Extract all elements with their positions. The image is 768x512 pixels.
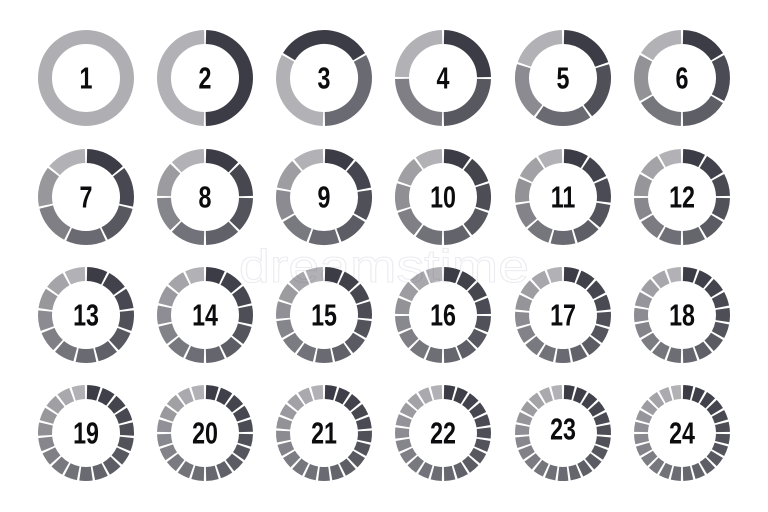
ring 4	[401, 36, 485, 120]
ring 10 segments	[384, 138, 502, 256]
ring 23 segments	[504, 374, 622, 492]
ring 20 segments	[146, 374, 264, 492]
ring 3 segments, dark one centred on top	[247, 1, 401, 155]
ring 5	[504, 19, 622, 137]
ring 9 segments	[265, 138, 383, 256]
number 9: 9	[318, 179, 330, 214]
ring 14	[146, 256, 264, 374]
number 3: 3	[318, 60, 330, 95]
number 7: 7	[80, 179, 92, 214]
ring 15	[265, 256, 383, 374]
ring 21	[265, 374, 383, 492]
ring 19	[27, 374, 145, 492]
ring 24	[623, 374, 741, 492]
number 8: 8	[199, 179, 211, 214]
ring 15 segments	[265, 256, 383, 374]
ring 11	[504, 138, 622, 256]
number 1: 1	[80, 60, 92, 95]
ring 1 segments	[45, 37, 127, 119]
ring 13 segments	[27, 256, 145, 374]
ring 6	[625, 21, 739, 135]
ring 5 segments	[504, 19, 622, 137]
number 15: 15	[311, 297, 337, 332]
ring 16 segments	[384, 256, 502, 374]
ring 4 segments	[401, 36, 485, 120]
ring 11 segments	[504, 138, 622, 256]
number 19: 19	[73, 415, 99, 450]
ring 22 segments	[384, 374, 502, 492]
ring 22	[384, 374, 502, 492]
ring 6 segments	[625, 21, 739, 135]
ring 2	[163, 36, 247, 120]
number 5: 5	[557, 60, 569, 95]
ring 7 segments	[27, 138, 145, 256]
number 24: 24	[669, 415, 696, 450]
number 12: 12	[669, 179, 695, 214]
number 6: 6	[676, 60, 688, 95]
number 2: 2	[199, 60, 211, 95]
number 4: 4	[437, 60, 450, 95]
ring 3	[247, 1, 401, 155]
ring 2 segments	[163, 36, 247, 120]
ring 20	[146, 374, 264, 492]
ring 10	[384, 138, 502, 256]
number 22: 22	[430, 415, 456, 450]
ring 7	[27, 138, 145, 256]
ring 13	[27, 256, 145, 374]
ring 18	[623, 256, 741, 374]
ring 23	[504, 374, 622, 492]
number 14: 14	[192, 297, 219, 332]
ring 12	[625, 140, 739, 254]
number 16: 16	[430, 297, 456, 332]
number 23: 23	[550, 411, 576, 446]
ring 8	[146, 138, 264, 256]
ring 24 segments	[623, 374, 741, 492]
ring 21 segments	[265, 374, 383, 492]
number 10: 10	[430, 179, 456, 214]
number 18: 18	[669, 297, 695, 332]
number 20: 20	[192, 415, 218, 450]
number 21: 21	[311, 415, 337, 450]
number 13: 13	[73, 297, 99, 332]
ring 19 segments	[27, 374, 145, 492]
ring 18 segments	[623, 256, 741, 374]
faint watermark: dreamstime	[239, 240, 529, 292]
ring 14 segments	[146, 256, 264, 374]
number 11: 11	[551, 179, 575, 214]
ring 17 segments	[504, 256, 622, 374]
ring 16	[384, 256, 502, 374]
number 17: 17	[550, 297, 576, 332]
ring 12 segments	[625, 140, 739, 254]
ring 1	[45, 37, 127, 119]
ring 17	[504, 256, 622, 374]
ring 9	[265, 138, 383, 256]
ring 8 segments	[146, 138, 264, 256]
